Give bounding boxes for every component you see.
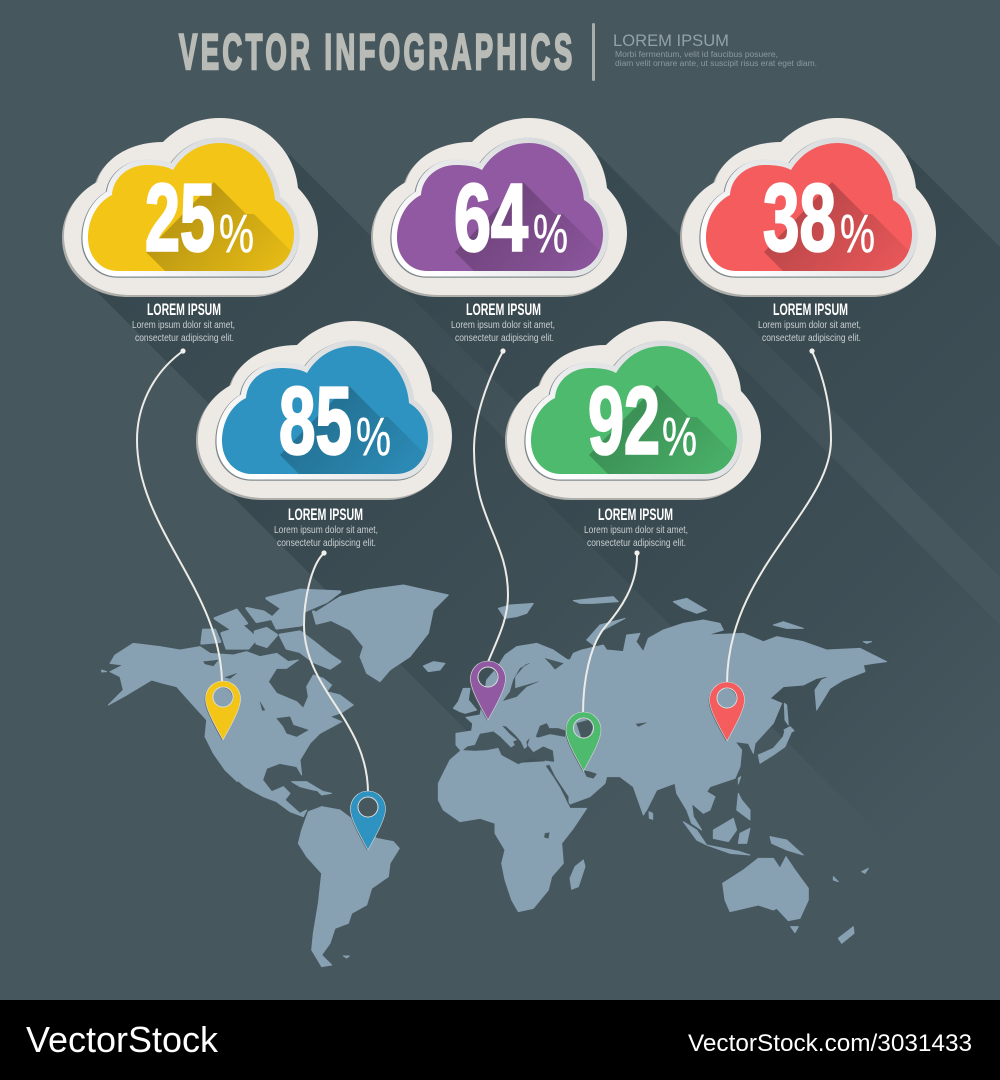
cloud: 38% red: % [840, 204, 875, 264]
caption: red cloud: LOREM IPSUM [773, 300, 848, 319]
map pin: red [709, 682, 744, 742]
map pin: yellow [205, 681, 240, 741]
connector lines [137, 351, 831, 793]
footer bar [0, 1000, 1000, 1080]
map: seas and lakes [463, 658, 647, 838]
caption: purple cloud [451, 300, 555, 344]
caption: green cloud: consectetur adipiscing elit. [587, 537, 686, 549]
cloud: 38% red [680, 118, 936, 297]
map: Australia [723, 857, 808, 921]
title: VECTOR INFOGRAPHICS [179, 23, 572, 80]
map pin: purple [470, 661, 506, 721]
cloud: 64% purple: % [533, 204, 568, 264]
header subtitle block: Morbi fermentum, velit id faucibus posuere, [615, 50, 778, 59]
header subtitle block: LOREM IPSUM [613, 31, 729, 50]
map: Europe, Asia, Africa, Australia [438, 597, 887, 943]
caption: red cloud: Lorem ipsum dolor sit amet, [758, 319, 861, 331]
map: Americas [102, 585, 448, 967]
caption: purple cloud: consectetur adipiscing elit. [455, 332, 554, 344]
caption: red cloud [758, 300, 861, 344]
map: Greenland [317, 585, 448, 682]
caption: blue cloud: consectetur adipiscing elit. [277, 537, 376, 549]
caption: yellow cloud [132, 300, 235, 344]
cloud: 38% red: 38 [763, 164, 836, 272]
caption: green cloud: Lorem ipsum dolor sit amet, [584, 524, 688, 536]
map pin: blue [350, 791, 386, 851]
world map [102, 585, 887, 967]
connector end dots [180, 348, 815, 556]
caption: purple cloud: Lorem ipsum dolor sit amet, [451, 319, 555, 331]
cloud: 92% green: % [662, 407, 697, 467]
caption: yellow cloud: Lorem ipsum dolor sit amet, [132, 319, 235, 331]
header subtitle block [613, 31, 817, 68]
caption: blue cloud [274, 505, 378, 549]
map: Eurasia [456, 620, 887, 830]
header subtitle block: diam velit ornare ante, ut suscipit risus erat eget diam. [615, 59, 817, 68]
footer url: VectorStock.com/3031433 [688, 1030, 972, 1057]
caption: blue cloud: Lorem ipsum dolor sit amet, [274, 524, 378, 536]
long shadows of clouds [93, 155, 1000, 851]
cloud: 85% blue: 85 [279, 368, 352, 474]
cloud: 64% purple: 64 [454, 164, 528, 272]
caption: yellow cloud: LOREM IPSUM [147, 300, 221, 319]
caption: purple cloud: LOREM IPSUM [466, 300, 541, 319]
caption: blue cloud: LOREM IPSUM [288, 505, 363, 524]
header divider [592, 23, 595, 81]
cloud: 25% yellow: 25 [145, 164, 215, 272]
cloud: 64% purple [371, 118, 627, 297]
footer logo: VectorStock [26, 1019, 219, 1060]
caption: red cloud: consectetur adipiscing elit. [762, 332, 861, 344]
caption: green cloud [584, 505, 688, 549]
cloud: 92% green: 92 [588, 368, 660, 474]
cloud: 25% yellow: % [219, 204, 254, 264]
cloud: 25% yellow [62, 118, 318, 297]
cloud: 85% blue [196, 321, 452, 500]
map pin: green [565, 712, 601, 772]
caption: green cloud: LOREM IPSUM [598, 505, 673, 524]
cloud: 85% blue: % [356, 407, 391, 467]
cloud: 92% green [505, 321, 761, 500]
map: South America [298, 807, 399, 967]
map: Africa [438, 747, 587, 912]
caption: yellow cloud: consectetur adipiscing elit. [135, 332, 234, 344]
